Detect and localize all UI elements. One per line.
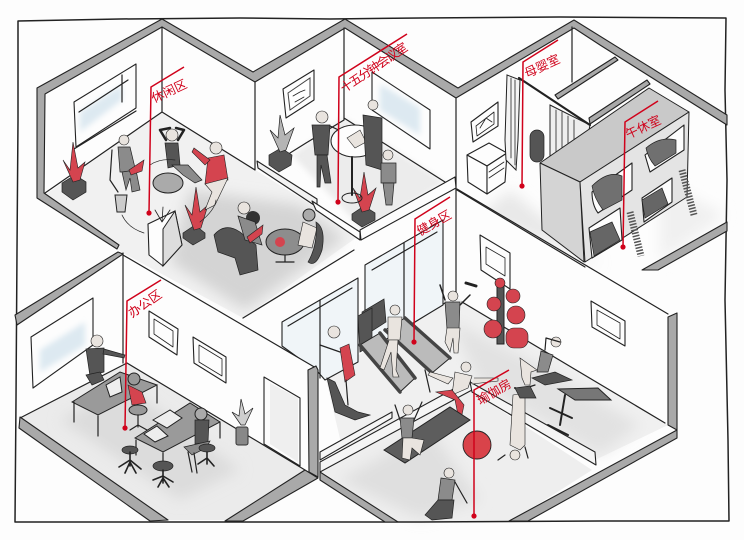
walls: room corner lines xyxy=(45,27,572,193)
pictures: office xyxy=(149,311,226,383)
equipment: treadmills xyxy=(358,299,450,392)
plant: lounge centre xyxy=(183,187,208,245)
panel: fitness room bands xyxy=(320,313,677,522)
person: man behind xyxy=(363,100,382,170)
label: 休闲区: 休闲区 xyxy=(149,77,189,106)
person: woman in red shirt xyxy=(128,373,147,430)
person: headstand xyxy=(498,385,536,460)
table: red centre xyxy=(266,229,304,262)
label: 瑜伽房 xyxy=(471,370,514,519)
panel: wall dividing 1 xyxy=(15,252,318,521)
icon: red ball xyxy=(463,431,491,459)
people: office xyxy=(72,335,220,487)
person: sofa pair xyxy=(214,202,263,275)
person: man in grey xyxy=(381,150,396,205)
label: 十五分钟会议室: 十五分钟会议室 xyxy=(337,39,410,95)
window: office xyxy=(31,298,93,388)
picture: nursing room xyxy=(471,102,498,142)
pictures: fitness xyxy=(480,235,625,346)
picture: meeting room xyxy=(283,70,314,118)
pedestal with small plant xyxy=(148,207,182,266)
person: sit-ups xyxy=(515,337,572,395)
person: kneeling woman xyxy=(395,402,424,460)
panel: low wall of meeting room xyxy=(257,161,456,240)
label: 午休室 xyxy=(620,101,663,250)
people: meeting room xyxy=(312,100,396,205)
table: office right xyxy=(135,403,220,470)
yoga mats xyxy=(384,407,470,463)
people: lounge xyxy=(110,128,323,275)
equipment: bench xyxy=(548,388,611,435)
label: 瑜伽房: 瑜伽房 xyxy=(474,376,514,408)
person: yoga balance xyxy=(425,362,498,424)
plant: meeting room corner xyxy=(269,115,294,172)
capsule: lower left xyxy=(589,208,622,258)
plant: meeting room xyxy=(352,172,376,227)
stools xyxy=(119,444,215,487)
capsule: lower right xyxy=(642,178,672,222)
windows: fitness xyxy=(282,220,443,380)
person: man with laptop xyxy=(110,135,144,192)
label: 母婴室: 母婴室 xyxy=(522,51,562,81)
icon: curtain xyxy=(505,75,590,170)
label: 健身区 xyxy=(411,197,454,345)
plant: office xyxy=(232,399,253,445)
person: seated man xyxy=(86,335,125,385)
equipment: weight rack xyxy=(484,278,528,348)
window: lounge xyxy=(74,64,136,149)
table: standing xyxy=(331,125,379,203)
person: woman in sofa chair xyxy=(298,209,323,264)
panel: nap capsule box xyxy=(540,88,689,262)
person: reclining man xyxy=(160,128,202,183)
person: standing man xyxy=(312,111,345,187)
panel: nursing room bands xyxy=(457,57,727,270)
panel: fitness room walls xyxy=(243,189,668,425)
person: sitting meditation xyxy=(425,468,467,520)
window: meeting room xyxy=(372,72,430,149)
label: 午休室: 午休室 xyxy=(623,112,663,142)
floor washes xyxy=(20,112,725,522)
table: office left xyxy=(72,372,157,436)
label: 母婴室 xyxy=(519,40,562,189)
plant: lounge left xyxy=(62,142,86,200)
walls: top ridge xyxy=(37,19,727,249)
capsule: upper left xyxy=(592,163,632,213)
person: woman in red xyxy=(192,142,228,210)
label: 休闲区 xyxy=(146,67,189,216)
icon: waste bin xyxy=(115,195,127,212)
label: 办公区 xyxy=(122,280,164,431)
label: 办公区: 办公区 xyxy=(125,287,164,320)
capsule: upper right xyxy=(645,125,684,172)
icon: nightstand xyxy=(467,143,507,194)
decorative arcs xyxy=(122,160,216,233)
door: office xyxy=(264,377,300,466)
person: woman at desk xyxy=(184,408,210,473)
icon: ladders xyxy=(630,170,694,256)
equipment: elliptical xyxy=(320,326,370,420)
person: man with dumbbell xyxy=(440,283,476,353)
person: on treadmill xyxy=(380,305,402,377)
label: 十五分钟会议室 xyxy=(335,34,410,205)
label: 健身区: 健身区 xyxy=(414,207,454,239)
table: lounge xyxy=(153,173,183,193)
